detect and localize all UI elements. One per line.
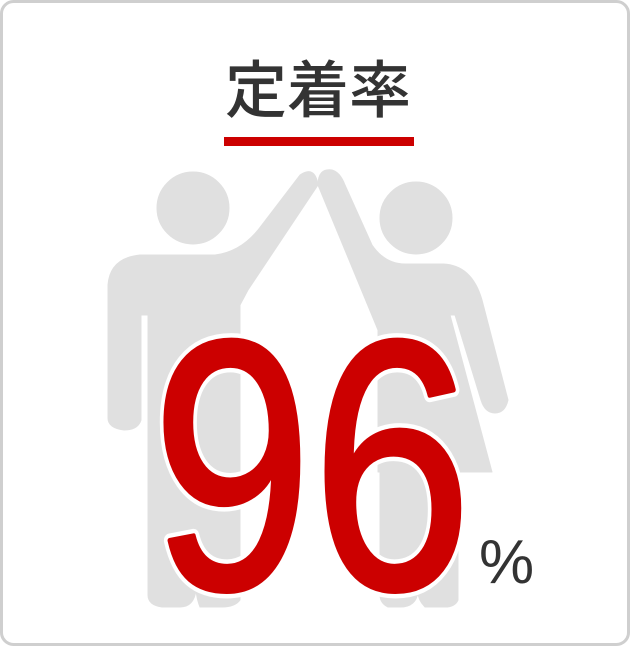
percent sign: %	[479, 528, 534, 597]
title underline	[224, 137, 414, 146]
left person	[108, 172, 318, 607]
title: 定着率	[225, 40, 411, 130]
right person	[318, 170, 508, 607]
icon: two people high five	[108, 170, 508, 607]
